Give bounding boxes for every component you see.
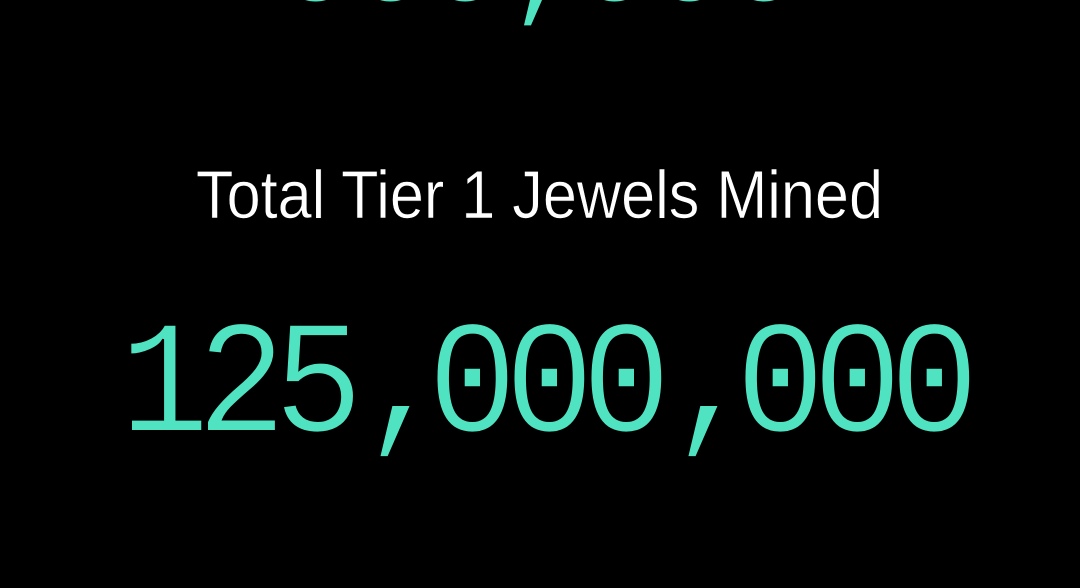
stat value: 125,000,000: 125,000,000 bbox=[120, 294, 979, 480]
heading: Total Tier 1 Jewels Mined: Total Tier 1 Jewels Mined bbox=[196, 157, 883, 233]
